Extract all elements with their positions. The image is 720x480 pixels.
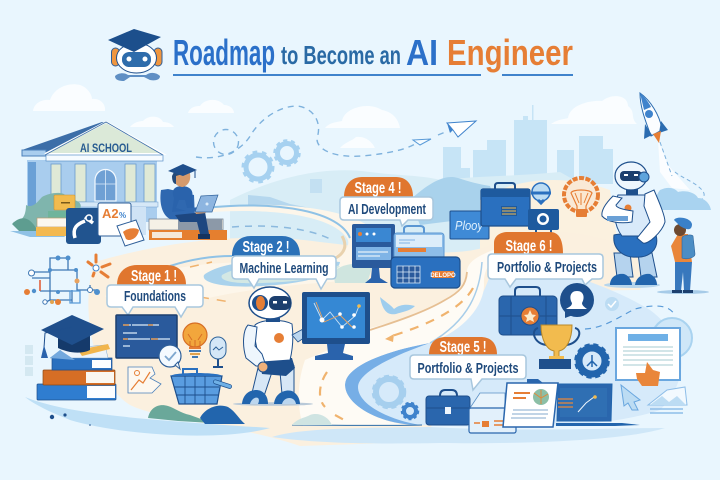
icon: light bulb xyxy=(183,323,207,358)
top blue book xyxy=(52,358,112,370)
stage 5 bubble xyxy=(410,355,526,390)
chart lines xyxy=(314,302,361,329)
stack of books with graduation cap xyxy=(37,315,116,400)
icon: Ploy card: Plooy xyxy=(455,218,484,233)
stage 1 text: Stage 1 ! xyxy=(131,268,177,285)
stage 2 text: Stage 2 ! xyxy=(242,239,290,256)
panel: AI school building xyxy=(22,122,163,235)
icon: stage 4 folder xyxy=(394,226,444,262)
icon: stage 4 control box xyxy=(391,257,460,288)
rocket with trail xyxy=(640,93,711,210)
dashed trail to document xyxy=(585,306,675,329)
icon: orange bulb xyxy=(564,178,598,217)
stage 5 label: Portfolio & Projects xyxy=(418,360,518,377)
icon: laptop xyxy=(556,384,640,426)
icon card: A2: A2 xyxy=(102,206,119,221)
icon card: A2 xyxy=(98,203,131,236)
bushes at bottom xyxy=(148,405,245,424)
faint squares xyxy=(25,345,33,376)
road from school xyxy=(105,205,383,310)
title: Engineer: Engineer xyxy=(447,32,573,73)
icon: stage 4 control box: DELOPO xyxy=(430,273,456,279)
icon: blue card xyxy=(469,393,516,433)
title: AI: AI xyxy=(406,32,438,73)
far hills xyxy=(230,170,620,260)
icon: mountain card xyxy=(648,387,687,413)
icon: sketch card xyxy=(128,367,161,393)
icon: gears xyxy=(244,141,299,182)
robot torso xyxy=(615,195,653,236)
ground: peach land xyxy=(25,232,650,446)
icon: trophy xyxy=(534,325,579,369)
teacher robot head xyxy=(249,287,291,319)
stage 2 tag xyxy=(232,236,300,256)
stage 5 text: Stage 5 ! xyxy=(440,339,486,356)
stage 5 tag xyxy=(429,337,497,355)
icon: large briefcase xyxy=(481,183,530,226)
icon: star briefcase xyxy=(499,287,557,335)
icon: orange sunburst xyxy=(88,255,110,277)
document card with hand xyxy=(616,328,680,386)
icon: headset xyxy=(531,183,551,203)
icon: shopping basket xyxy=(171,369,232,404)
chart monitor xyxy=(302,292,370,360)
bushes by the school xyxy=(10,193,81,237)
icon: profile bubble xyxy=(560,283,594,318)
stage 2 group xyxy=(232,236,336,289)
stage 2 label: Machine Learning xyxy=(240,260,328,277)
icon: clipboard report xyxy=(503,379,558,427)
stage 1 bubble xyxy=(107,285,203,317)
big robot at right xyxy=(602,162,665,288)
main road xyxy=(272,248,665,443)
dashed flight path xyxy=(196,106,448,158)
title underline xyxy=(173,74,573,76)
robot teacher xyxy=(233,287,317,406)
stage 4 bubble xyxy=(340,197,433,226)
icon: light gears xyxy=(374,376,418,419)
school label: AI SCHOOL xyxy=(80,141,132,155)
title: to Become an: to Become an xyxy=(281,40,401,70)
stage 5 group xyxy=(410,337,526,390)
orange book xyxy=(43,370,115,385)
icon: microphone xyxy=(210,337,226,367)
stage 4 label: AI Development xyxy=(348,201,426,218)
hand xyxy=(636,362,660,386)
child with backpack xyxy=(657,218,709,294)
icon: stage 4 monitor xyxy=(352,224,395,283)
robot head xyxy=(615,162,647,190)
robot legs xyxy=(614,253,657,277)
robot arms xyxy=(602,196,633,223)
title: Roadmap: Roadmap xyxy=(173,32,275,73)
skyline xyxy=(443,105,613,184)
bottom blue book xyxy=(37,384,116,400)
stage 1 tag xyxy=(117,265,186,285)
icon: paper planes xyxy=(413,121,476,145)
dots xyxy=(50,413,91,426)
graduation cap xyxy=(58,335,90,353)
icon card: A2: % xyxy=(119,211,126,220)
teacher robot torso xyxy=(255,320,293,362)
stage 4 group xyxy=(340,177,433,226)
stage 6 label: Portfolio & Projects xyxy=(497,259,597,276)
books with yellow box xyxy=(36,195,76,236)
stage 6 group xyxy=(488,232,603,287)
stage 1 group xyxy=(107,265,203,317)
student with laptop on books xyxy=(149,164,227,240)
stage 6 bubble xyxy=(488,254,603,287)
icon: graduate robot mascot xyxy=(108,29,162,81)
icon: dark gear xyxy=(576,345,608,377)
icon: blue leaf xyxy=(380,297,415,314)
stage 4 text: Stage 4 ! xyxy=(354,180,402,197)
stage 6 text: Stage 6 ! xyxy=(506,238,552,255)
icon: check bubble xyxy=(159,345,181,369)
stage 1 label: Foundations xyxy=(124,288,186,305)
network diagram xyxy=(24,256,100,305)
book pile under student xyxy=(149,219,227,240)
icon: code board xyxy=(116,315,177,358)
teacher robot legs xyxy=(252,366,294,396)
stage 2 bubble xyxy=(232,256,336,289)
document xyxy=(616,328,680,380)
icon: cursor xyxy=(621,385,640,410)
teacher robot arms xyxy=(244,325,266,366)
icon: Ploy card xyxy=(450,211,489,239)
ground: blue lagoon right xyxy=(345,262,681,427)
icon: faint globe xyxy=(652,318,692,358)
title xyxy=(173,32,573,75)
clouds xyxy=(33,84,637,148)
icon: small briefcase xyxy=(426,390,470,425)
icon: check badge xyxy=(605,297,619,311)
icon card: orange shape xyxy=(117,220,144,246)
icon: camera box xyxy=(528,209,559,233)
icon card: robot arm xyxy=(66,208,101,244)
stage 4 tag xyxy=(344,177,413,197)
stage 6 tag xyxy=(494,232,563,254)
